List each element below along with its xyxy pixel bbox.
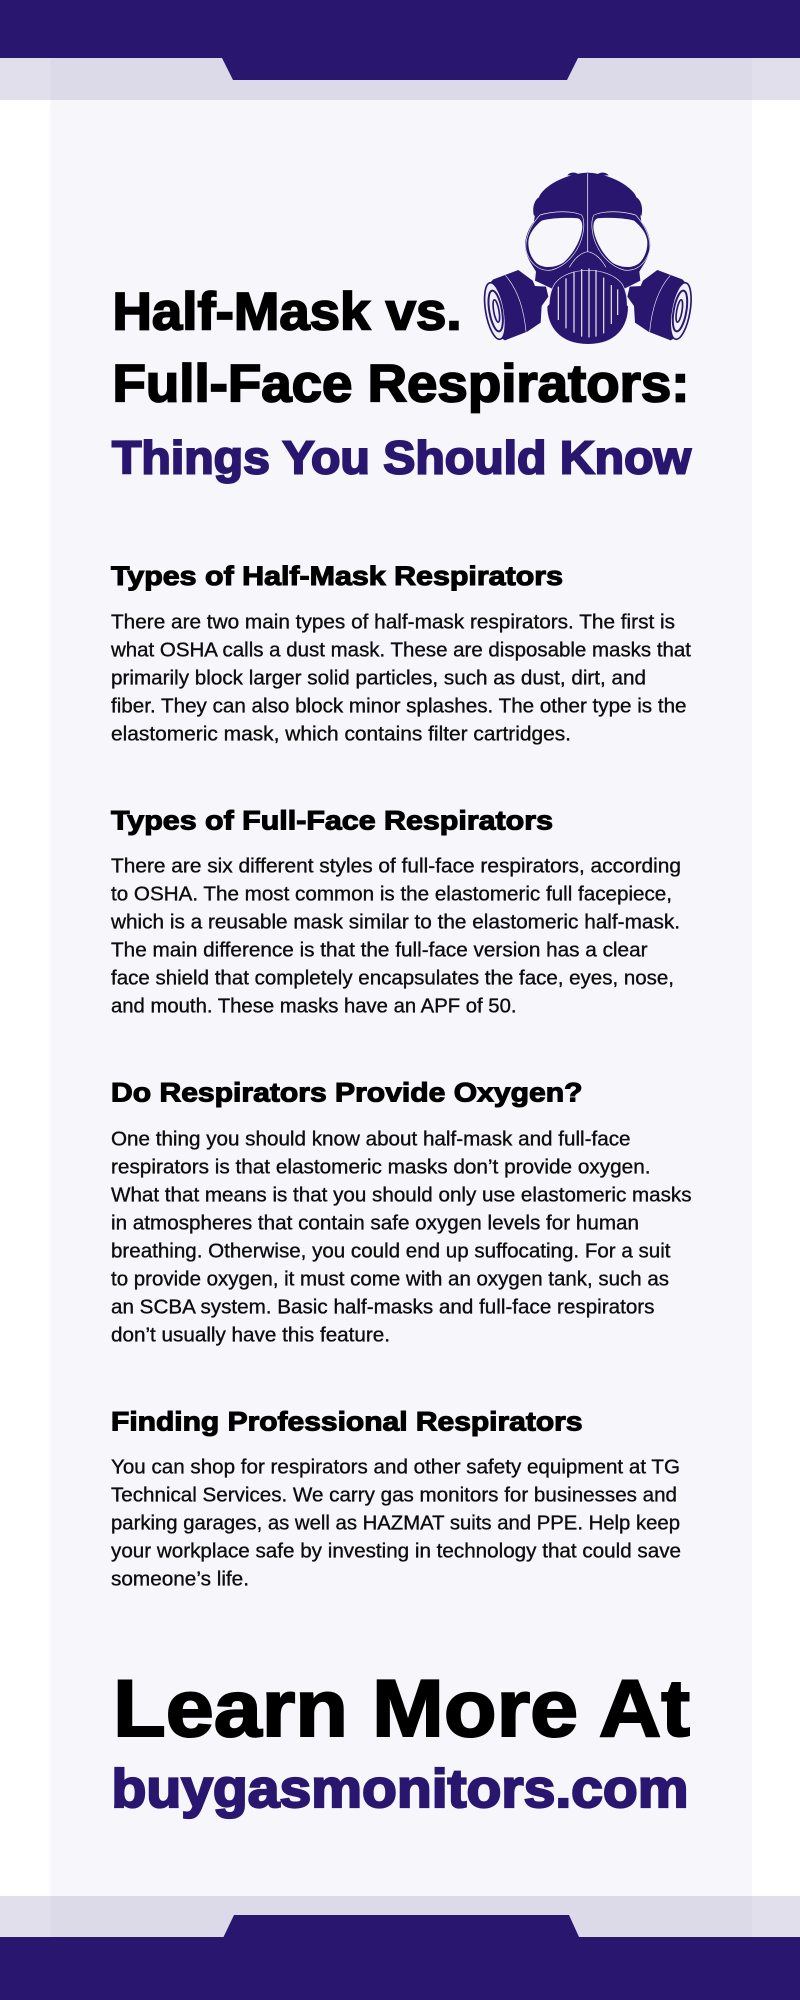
body text xyxy=(111,1456,681,1590)
section: do respirators provide oxygen xyxy=(111,1078,691,1346)
heading: Types of Full-Face Respirators xyxy=(111,806,553,836)
body text: Technical Services. We carry gas monitors for businesses and xyxy=(111,1484,677,1506)
section: types of full-face respirators xyxy=(110,806,681,1018)
body text: The main difference is that the full-face version has a clear xyxy=(111,938,648,962)
body text xyxy=(111,1128,691,1346)
body text: to OSHA. The most common is the elastomeric full facepiece, xyxy=(111,882,672,906)
body text: what OSHA calls a dust mask. These are disposable masks that xyxy=(110,638,691,662)
body text: which is a reusable mask similar to the elastomeric half-mask. xyxy=(110,910,680,934)
body text: and mouth. These masks have an APF of 50. xyxy=(111,994,516,1018)
filter xyxy=(549,270,627,344)
body text: fiber. They can also block minor splashes. The other type is the xyxy=(111,694,686,718)
body text: elastomeric mask, which contains filter cartridges. xyxy=(111,722,571,746)
icon: gas mask xyxy=(481,173,695,344)
body text: in atmospheres that contain safe oxygen levels for human xyxy=(111,1212,639,1234)
body text xyxy=(110,854,681,1018)
title xyxy=(112,282,691,484)
section: types of half-mask respirators xyxy=(110,561,691,746)
body text: your workplace safe by investing in technology that could save xyxy=(111,1540,681,1562)
right lens xyxy=(593,218,647,267)
call to action xyxy=(112,1664,690,1819)
body text: don’t usually have this feature. xyxy=(111,1324,390,1346)
body text: There are six different styles of full-face respirators, according xyxy=(111,854,681,878)
body text: One thing you should know about half-mask and full-face xyxy=(111,1128,630,1150)
left canister xyxy=(481,270,548,341)
body text: respirators is that elastomeric masks don’t provide oxygen. xyxy=(111,1156,650,1178)
left lens xyxy=(528,218,582,267)
body text: breathing. Otherwise, you could end up suffocating. For a suit xyxy=(111,1240,671,1262)
subtitle: Things You Should Know xyxy=(112,432,691,484)
heading: Types of Half-Mask Respirators xyxy=(111,561,563,591)
top banner xyxy=(0,0,800,100)
body text: an SCBA system. Basic half-masks and full-face respirators xyxy=(111,1296,654,1318)
filter stripes xyxy=(558,268,618,337)
heading: Finding Professional Respirators xyxy=(111,1406,582,1436)
body text: You can shop for respirators and other safety equipment at TG xyxy=(111,1456,680,1478)
title: Half-Mask vs. xyxy=(112,282,461,342)
body text: primarily block larger solid particles, such as dust, dirt, and xyxy=(111,666,646,690)
bottom banner xyxy=(0,1896,800,2000)
body text: parking garages, as well as HAZMAT suits and PPE. Help keep xyxy=(111,1512,680,1534)
head and face xyxy=(525,173,650,290)
section: finding professional respirators xyxy=(111,1406,681,1590)
body text: someone’s life. xyxy=(111,1568,249,1590)
body text xyxy=(110,610,691,746)
title: Full-Face Respirators: xyxy=(112,354,690,414)
right canister xyxy=(627,270,695,341)
body text: face shield that completely encapsulates the face, eyes, nose, xyxy=(111,966,674,990)
website: buygasmonitors.com xyxy=(112,1759,688,1819)
body text: What that means is that you should only use elastomeric masks xyxy=(111,1184,691,1206)
call to action: Learn More At xyxy=(113,1664,690,1754)
heading: Do Respirators Provide Oxygen? xyxy=(111,1078,582,1108)
lens frame highlights xyxy=(526,173,650,270)
body text: There are two main types of half-mask respirators. The first is xyxy=(111,610,675,634)
body text: to provide oxygen, it must come with an oxygen tank, such as xyxy=(111,1268,669,1290)
